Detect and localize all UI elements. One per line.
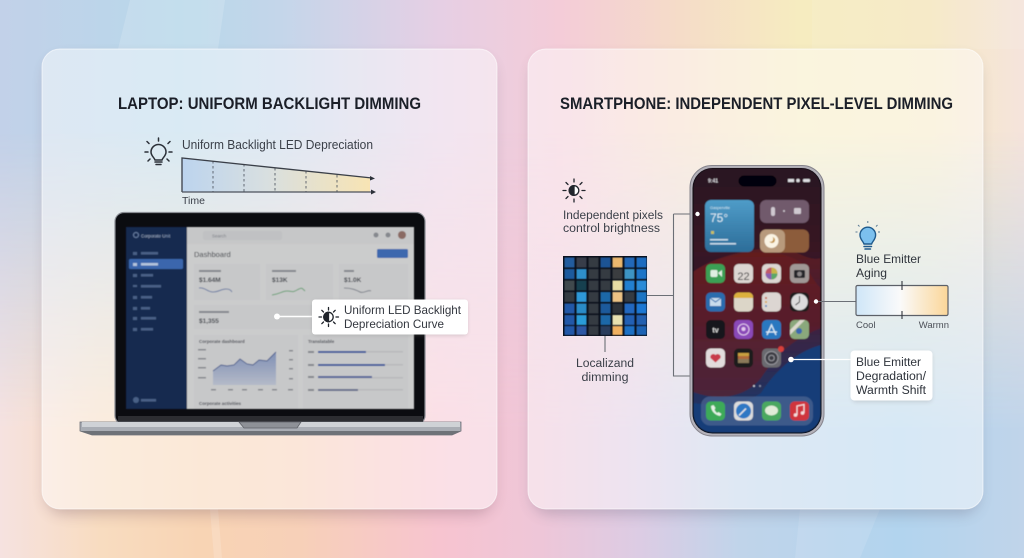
stat cards: $1.0K bbox=[344, 277, 362, 284]
dashboard heading: Dashboard bbox=[194, 250, 231, 259]
area chart card bbox=[194, 335, 298, 409]
label: localized dimming: Localizand bbox=[576, 358, 634, 370]
callout: uniform LED: Depreciation Curve bbox=[344, 317, 444, 331]
chart: cool to warm bar bbox=[856, 281, 949, 331]
label: control brightness: control brightness bbox=[563, 223, 660, 235]
screen wallpaper bbox=[693, 168, 821, 433]
heading: laptop: LAPTOP: UNIFORM BACKLIGHT DIMMING bbox=[118, 94, 421, 113]
stat cards: $1.64M bbox=[199, 277, 221, 284]
keyboard hinge bbox=[118, 416, 423, 422]
widget: weather: Gasperville bbox=[710, 205, 731, 210]
callout: blue emitter degradation bbox=[850, 350, 932, 402]
panel: smartphone bbox=[528, 49, 983, 514]
stat cards bbox=[194, 264, 408, 300]
icon: half sun bbox=[319, 308, 338, 326]
heading: smartphone: SMARTPHONE: INDEPENDENT PIXEL-LEVEL DIMMING bbox=[560, 94, 953, 113]
callout: blue emitter degradation: Blue Emitter bbox=[856, 357, 921, 369]
button bbox=[377, 249, 408, 258]
widget: weather bbox=[705, 200, 754, 252]
status bar bbox=[708, 178, 810, 184]
sidebar: Corporate Unit bbox=[141, 234, 171, 238]
bar list card bbox=[303, 335, 408, 409]
connector: brightness dot bbox=[695, 212, 700, 216]
callout: uniform LED: Uniform LED Backlight bbox=[344, 303, 462, 317]
widget: controls bbox=[760, 200, 809, 223]
dynamic island bbox=[738, 176, 776, 186]
chart: pixel grid bbox=[563, 256, 647, 336]
sidebar bbox=[126, 227, 187, 409]
icon: half sun brightness bbox=[563, 179, 585, 202]
app icons row 3: tv bbox=[712, 328, 719, 334]
status bar: 9:41 bbox=[708, 178, 718, 184]
panel: laptop bbox=[42, 49, 497, 514]
estimated card: $1,355 bbox=[199, 318, 219, 325]
area chart card: Corporate dashboard bbox=[199, 339, 245, 344]
phone bbox=[690, 166, 824, 436]
laptop base bbox=[80, 422, 461, 435]
icon: light bulb bbox=[145, 138, 172, 164]
app icons row 3 bbox=[706, 320, 809, 339]
stat cards: $13K bbox=[272, 277, 288, 284]
connector: grid to phone bbox=[647, 214, 693, 376]
chart: cool to warm bar: Warmn bbox=[919, 320, 949, 331]
label: localized dimming bbox=[576, 358, 634, 384]
app icons row 4 bbox=[706, 346, 784, 368]
widget: focus bbox=[760, 230, 809, 252]
bar list card: Translatable bbox=[308, 339, 335, 344]
label: blue emitter aging: Blue Emitter bbox=[856, 252, 921, 266]
area chart card: Corporate activities bbox=[199, 401, 242, 406]
label: localized dimming: dimming bbox=[582, 372, 628, 384]
callout: uniform LED bbox=[274, 300, 468, 335]
app icons row 1 bbox=[706, 264, 809, 283]
connector: grid to label bbox=[604, 336, 606, 352]
estimated card bbox=[194, 305, 408, 329]
screen: dashboard bbox=[126, 227, 414, 409]
connector: degradation callout bbox=[788, 357, 851, 362]
label: independent pixels: Independent pixels bbox=[563, 210, 663, 222]
callout: blue emitter degradation: Warmth Shift bbox=[856, 385, 927, 397]
chart: cool to warm bar: Cool bbox=[856, 320, 876, 331]
label: blue emitter aging bbox=[856, 252, 921, 280]
callout: blue emitter degradation: Degradation/ bbox=[856, 371, 927, 383]
app icons row 2 bbox=[706, 292, 809, 312]
app icons row 1: 22 bbox=[737, 271, 750, 283]
icon: blue bulb bbox=[856, 221, 880, 249]
page dots bbox=[753, 385, 761, 387]
top bar bbox=[187, 227, 414, 244]
label: time: Time bbox=[182, 195, 205, 207]
connector: blue emitter aging bbox=[814, 299, 856, 304]
top bar: Search bbox=[212, 234, 227, 238]
chart: backlight depreciation wedge bbox=[182, 158, 376, 207]
widget: weather: 75° bbox=[710, 211, 728, 225]
label: backlight depreciation: Uniform Backlight LED Depreciation bbox=[182, 138, 373, 152]
label: blue emitter aging: Aging bbox=[856, 266, 887, 280]
laptop bbox=[80, 212, 461, 435]
dock bbox=[701, 396, 813, 426]
